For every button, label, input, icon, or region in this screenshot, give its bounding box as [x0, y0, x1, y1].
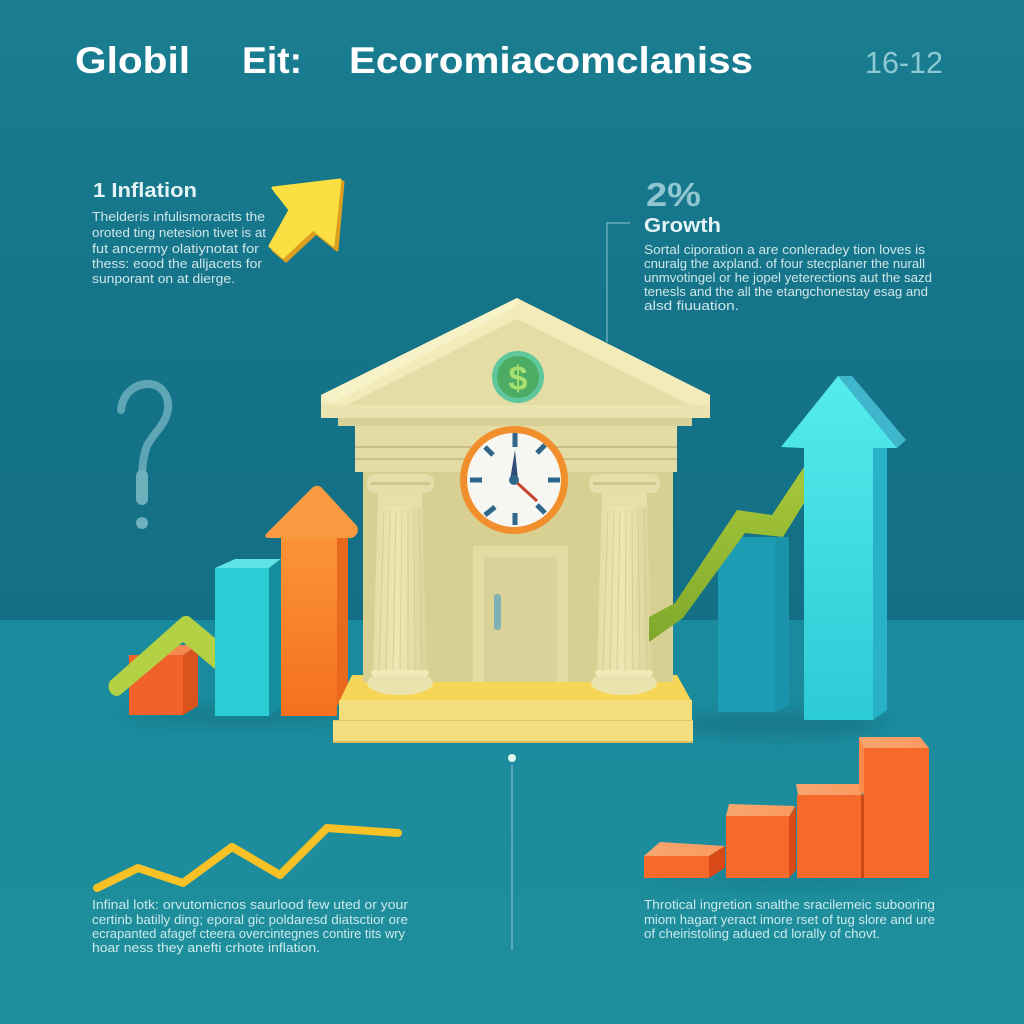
cyan bar: [215, 559, 281, 716]
bar 2: [726, 804, 796, 878]
icon: dollar coin: [492, 351, 544, 403]
bottom right text: [644, 898, 935, 941]
entablature: [338, 418, 692, 472]
icon: question mark: [121, 384, 168, 526]
orange arrow bar: [265, 486, 358, 716]
icon: dollar coin: $: [509, 360, 528, 398]
icon: yellow arrow: [270, 180, 343, 261]
growth text: cnuralg the axpland. of four stecplaner the nurall: [644, 257, 925, 271]
right chart floor shadow: [675, 714, 885, 734]
floor shadow: [120, 709, 360, 723]
orange stepped bars: [644, 737, 929, 878]
growth text: alsd fiuuation.: [644, 299, 739, 313]
door handle: [494, 594, 501, 630]
date label: 16-12: [865, 45, 943, 80]
bottom left text: Infinal lotk: orvutomicnos saurlood few uted or your: [92, 898, 408, 912]
bar 1: [644, 842, 725, 878]
bottom left text: ecrapanted afagef cteera overcintegnes contire tits wry: [92, 927, 406, 941]
growth heading: Growth: [644, 215, 721, 237]
inflation text: fut ancermy olatiynotat for: [92, 242, 259, 256]
tall cyan arrow: [781, 376, 906, 720]
inflation text: sunporant on at dierge.: [92, 272, 235, 286]
inflation heading: 1 Inflation: [93, 180, 197, 202]
bank building: [321, 298, 710, 743]
inflation text: thess: eood the alljacets for: [92, 257, 262, 271]
title: Ecoromiacomclaniss: [349, 40, 753, 81]
left chart group: [108, 486, 360, 723]
teal bar: [718, 537, 789, 712]
growth text: unmvotingel or he jopel yeterections aut the sazd: [644, 271, 932, 285]
title: [75, 40, 753, 81]
bottom left text: certinb batilly ding; eporal gic poldaresd diatsctior ore: [92, 913, 408, 927]
bottom left panel: [92, 828, 408, 955]
growth text: tenesls and the all the etangchonestay esag and: [644, 285, 928, 299]
panel: growth: [607, 176, 932, 342]
inflation text: Thelderis infulismoracits the: [92, 210, 265, 224]
right column: [589, 474, 660, 695]
building wall: [363, 470, 673, 682]
growth text: Sortal ciporation a are conleradey tion loves is: [644, 243, 925, 257]
panel: inflation: [92, 180, 267, 286]
inflation text: oroted ting netesion tivet is at: [92, 226, 267, 240]
title: Globil: [75, 40, 190, 81]
bottom right text: of cheiristoling adued cd lorally of chovt.: [644, 927, 880, 941]
pediment: [321, 298, 710, 418]
right chart group: [649, 376, 906, 720]
green growth line: [649, 467, 804, 642]
background floor: [0, 620, 1024, 1024]
bottom right text: Throtical ingretion snalthe sracilemeic subooring: [644, 898, 935, 912]
yellow line chart: [97, 828, 398, 888]
base steps: [333, 675, 693, 743]
bottom left text: [92, 898, 408, 955]
center divider: [508, 754, 516, 950]
bar chart shadow: [650, 875, 930, 885]
growth figure: 2%: [646, 176, 701, 213]
bar 4: [859, 737, 929, 878]
bottom right text: miom hagart yeract imore rset of tug slore and ure: [644, 913, 935, 927]
bottom right panel: [644, 737, 935, 941]
growth leader line: [607, 223, 630, 342]
icon: clock: [460, 426, 568, 534]
bottom left text: hoar ness they anefti crhote inflation.: [92, 941, 320, 955]
green line arrow: [108, 616, 215, 696]
door: [473, 546, 568, 682]
inflation text: [92, 210, 267, 286]
bar 3: [796, 784, 862, 878]
growth text: [644, 243, 932, 313]
small orange block: [129, 645, 198, 715]
left column: [367, 474, 434, 695]
title: Eit:: [242, 40, 302, 81]
background wall: [0, 0, 1024, 620]
